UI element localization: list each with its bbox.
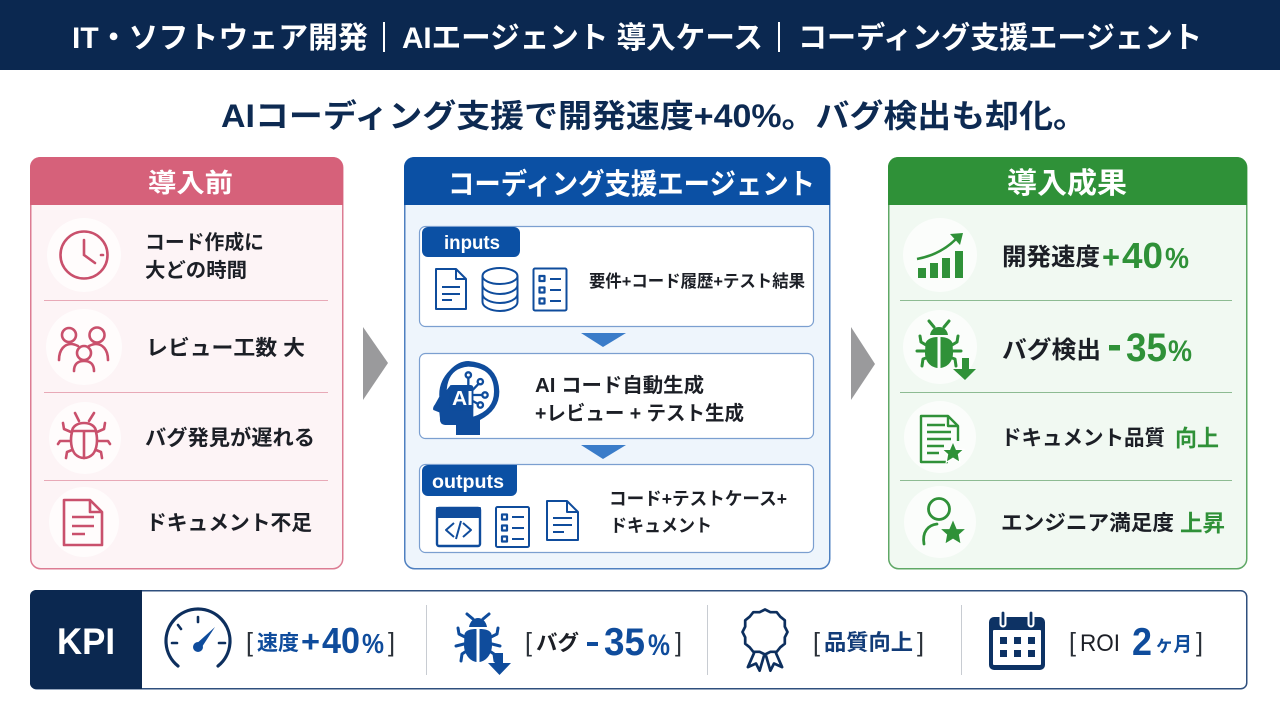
item: review effort: [46, 309, 305, 385]
title bar: コーディング支援エージェント: [798, 21, 1202, 55]
KPI: bugs: ]: [675, 627, 682, 657]
item: late bug discovery: [49, 402, 315, 474]
tag: outputs: outputs: [432, 472, 504, 493]
result: bugs: 35: [1126, 326, 1167, 370]
KPI: speed: ]: [388, 627, 395, 657]
KPI label: KPI: [57, 621, 115, 662]
arrow: AI to outputs: [581, 445, 626, 459]
KPI: ROI: [989, 613, 1203, 670]
tag: outputs: [422, 465, 517, 496]
KPI: ROI: 2: [1132, 621, 1152, 664]
KPI: ROI: ヶ月: [1155, 634, 1192, 656]
icon: bug down: [456, 614, 511, 675]
result: bugs: %: [1168, 335, 1192, 368]
minus sign: [1109, 345, 1120, 350]
result: speed: %: [1165, 243, 1189, 275]
tag: inputs: [422, 227, 520, 257]
KPI: speed: %: [362, 628, 384, 659]
KPI: bugs: [: [525, 627, 533, 657]
result: engineer satisfaction: [904, 486, 1225, 558]
headline: AIコーディング支援で開発速度+40%。バグ検出も却化。: [221, 98, 1087, 134]
box: outputs: コード+テストケース+: [609, 489, 787, 509]
item: missing docs: [49, 487, 312, 557]
result: speed: +: [1102, 239, 1120, 275]
item: missing docs: ドキュメント不足: [146, 512, 312, 535]
item: code time: [47, 218, 264, 292]
result: doc quality: [904, 401, 1219, 473]
item: review effort: レビュー工数 大: [146, 337, 305, 360]
result: speed: 開発速度: [1002, 244, 1100, 271]
minus sign: [587, 642, 598, 646]
item: code time: コード作成に: [145, 230, 264, 254]
result: speed: 40: [1122, 235, 1163, 276]
result: bugs: [903, 310, 1192, 384]
panel: agent: [404, 157, 830, 569]
KPI: quality: ]: [917, 627, 924, 657]
icon: gauge: [166, 609, 230, 666]
panel header: results: 導入成果: [1007, 167, 1127, 200]
arrow: agent to results: [851, 327, 875, 400]
panel header: before: 導入前: [148, 168, 233, 198]
panel header: before: [30, 157, 343, 205]
KPI: speed: [166, 609, 395, 666]
result: bugs: バグ検出: [1002, 336, 1101, 364]
KPI: quality: 品質向上: [824, 630, 913, 655]
item: code time: 大どの時間: [145, 259, 247, 282]
box: AI generation: +レビュー + テスト生成: [535, 401, 744, 425]
result: speed: [903, 218, 1189, 292]
arrow: before to agent: [363, 327, 388, 400]
KPI: bugs: 35: [604, 621, 645, 664]
icon: AI head: AI: [452, 388, 473, 410]
title bar: [0, 0, 1280, 70]
box: AI generation: [420, 354, 814, 438]
KPI: bugs: バグ: [536, 631, 579, 655]
box: outputs: ドキュメント: [610, 516, 712, 536]
KPI label: [30, 590, 142, 689]
panel header: agent: [404, 157, 830, 205]
KPI: bugs: [456, 614, 682, 675]
KPI: quality: [742, 610, 924, 671]
arrow: inputs to AI: [581, 333, 626, 347]
result: doc quality: 向上: [1175, 425, 1219, 451]
panel header: results: [888, 157, 1247, 205]
title bar: AIエージェント 導入ケース: [402, 22, 763, 55]
KPI: speed: 40: [322, 620, 360, 661]
box: AI generation: AI コード自動生成: [535, 373, 704, 397]
KPI: speed: +: [301, 624, 320, 659]
icon: calendar: [989, 613, 1045, 670]
title bar: IT・ソフトウェア開発: [72, 22, 368, 55]
icon: AI head: [433, 361, 499, 435]
KPI: ROI: [: [1069, 627, 1077, 657]
KPI bar: [30, 590, 1247, 689]
box: inputs: [420, 226, 814, 326]
result: engineer satisfaction: エンジニア満足度: [1001, 512, 1174, 535]
icons: inputs: [436, 268, 566, 311]
icons: outputs: [437, 501, 578, 547]
panel header: agent: コーディング支援エージェント: [448, 167, 815, 201]
box: outputs: [420, 464, 814, 552]
KPI: ROI: ]: [1196, 627, 1203, 657]
item: late bug discovery: バグ発見が遅れる: [145, 426, 315, 450]
box: inputs: 要件+コード履歴+テスト結果: [589, 272, 805, 291]
KPI: speed: [: [246, 627, 254, 657]
panel: results: [888, 157, 1247, 569]
KPI: quality: [: [813, 627, 821, 657]
KPI: ROI: ROI: [1080, 630, 1120, 657]
KPI: bugs: %: [648, 629, 670, 662]
result: doc quality: ドキュメント品質: [1001, 427, 1165, 450]
result: engineer satisfaction: 上昇: [1180, 510, 1225, 536]
panel: before: [30, 157, 343, 569]
icon: ribbon badge: [742, 610, 788, 671]
tag: inputs: inputs: [444, 233, 500, 254]
KPI: speed: 速度: [257, 632, 299, 655]
